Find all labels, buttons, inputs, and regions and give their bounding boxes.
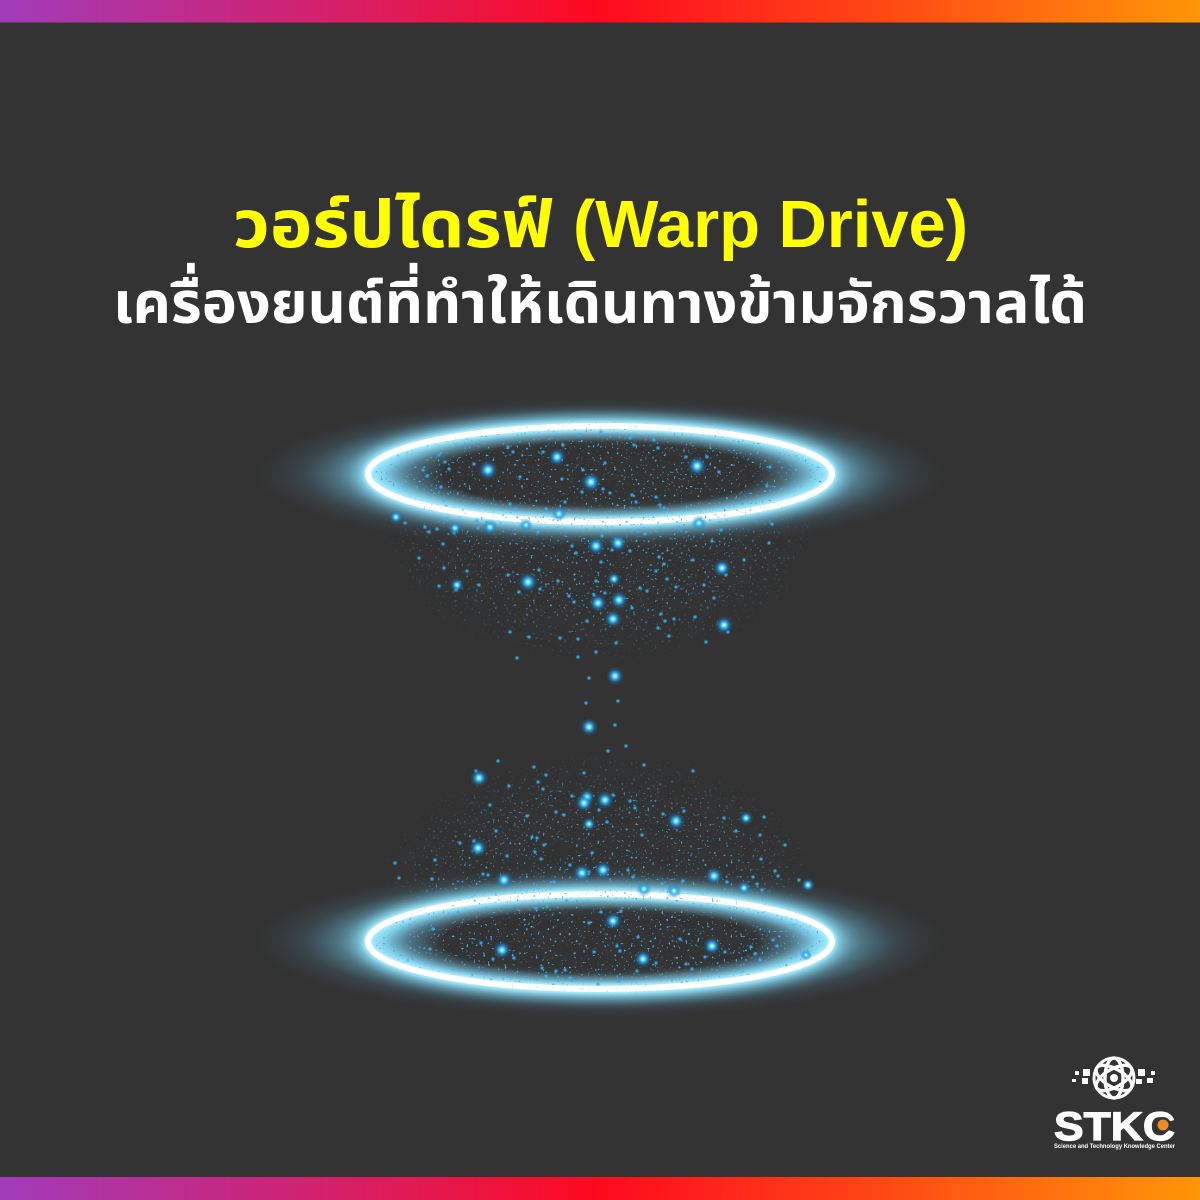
- top gradient bar: [0, 0, 1200, 22]
- bright stars: [389, 448, 815, 968]
- bottom gradient bar: [0, 1177, 1200, 1200]
- icon: pixel squares: [1072, 1069, 1155, 1084]
- heading: warp drive: (Warp Drive): [573, 187, 968, 262]
- heading: warp drive: [233, 187, 968, 262]
- heading: warp drive: วอร์ปไดรฟ์: [233, 187, 553, 261]
- tagline: Science and Technology Knowledge Center: [1054, 1143, 1175, 1150]
- logo: STKC: [1054, 1058, 1175, 1150]
- fine particle dust: [375, 395, 825, 1010]
- icon: orange dot: [1155, 1117, 1171, 1133]
- top portal ring: [255, 398, 945, 550]
- subheading: เครื่องยนต์ที่ทำให้เดินทางข้ามจักรวาลได้: [113, 262, 1087, 336]
- icon: atom: [1092, 1058, 1136, 1098]
- wordmark: STKC: [1054, 1105, 1175, 1149]
- bottom portal ring: [255, 866, 945, 1018]
- title: [113, 187, 1087, 336]
- medium particles: [395, 432, 799, 984]
